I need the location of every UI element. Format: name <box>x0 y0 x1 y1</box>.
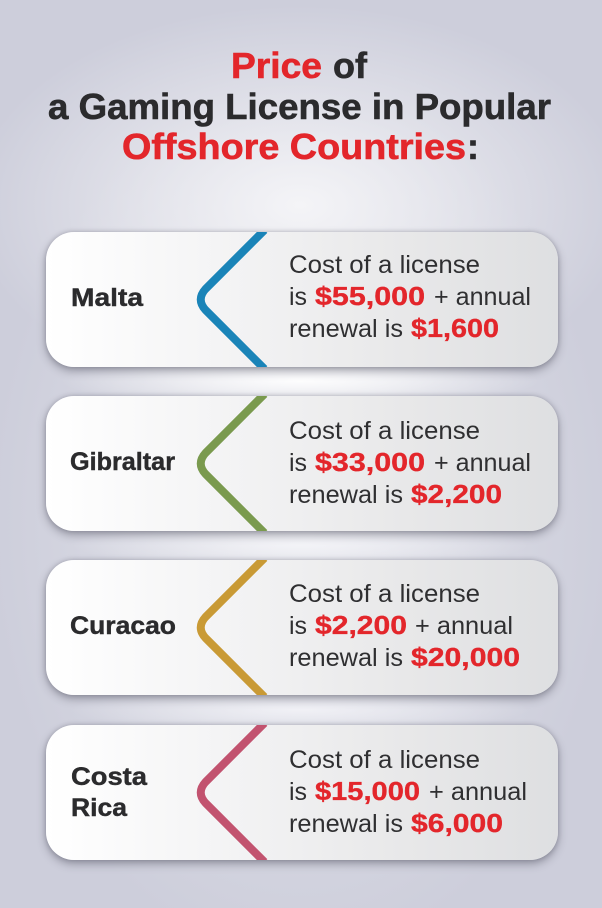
price text <box>289 580 520 672</box>
price text: + annual <box>415 612 513 640</box>
title: a Gaming License in Popular <box>48 86 551 127</box>
panel: Costa Rica <box>46 725 558 860</box>
price text: + annual <box>434 283 531 311</box>
price text: Cost of a license <box>289 417 480 445</box>
price text: + annual <box>434 449 531 477</box>
icon: blue chevron <box>201 230 264 369</box>
price text: $20,000 <box>411 642 520 672</box>
title: Price <box>231 45 322 86</box>
price text: $6,000 <box>411 808 503 838</box>
title: of <box>333 45 368 86</box>
price text: renewal is <box>289 810 403 838</box>
panel: Malta <box>46 232 558 367</box>
icon: gold chevron <box>201 558 264 697</box>
price text: + annual <box>429 778 527 806</box>
price text: $2,200 <box>315 610 407 640</box>
price text: Cost of a license <box>289 580 480 608</box>
country name: Curacao <box>70 612 176 640</box>
price text: $33,000 <box>315 447 425 477</box>
panel: Gibraltar <box>46 396 558 531</box>
icon: green chevron <box>201 394 264 533</box>
price text: $1,600 <box>411 313 499 343</box>
country name <box>71 763 148 822</box>
price text: is <box>289 449 307 477</box>
price text: renewal is <box>289 644 403 672</box>
title: Offshore Countries <box>122 126 466 167</box>
icon: rose chevron <box>201 723 264 862</box>
price text: Cost of a license <box>289 251 480 279</box>
price text <box>289 746 527 838</box>
title: : <box>467 126 479 167</box>
country name: Malta <box>71 284 144 312</box>
country name: Gibraltar <box>70 448 175 476</box>
panel: Curacao <box>46 560 558 695</box>
price text: $2,200 <box>411 479 502 509</box>
price text: $15,000 <box>315 776 420 806</box>
price text: Cost of a license <box>289 746 480 774</box>
price text: renewal is <box>289 481 403 509</box>
title <box>48 45 551 167</box>
price text: is <box>289 778 307 806</box>
country name: Costa <box>71 763 148 791</box>
price text: $55,000 <box>315 281 425 311</box>
price text: is <box>289 283 307 311</box>
price text: is <box>289 612 307 640</box>
country name: Rica <box>71 794 128 822</box>
price text <box>289 417 531 509</box>
price text: renewal is <box>289 315 403 343</box>
price text <box>289 251 531 343</box>
